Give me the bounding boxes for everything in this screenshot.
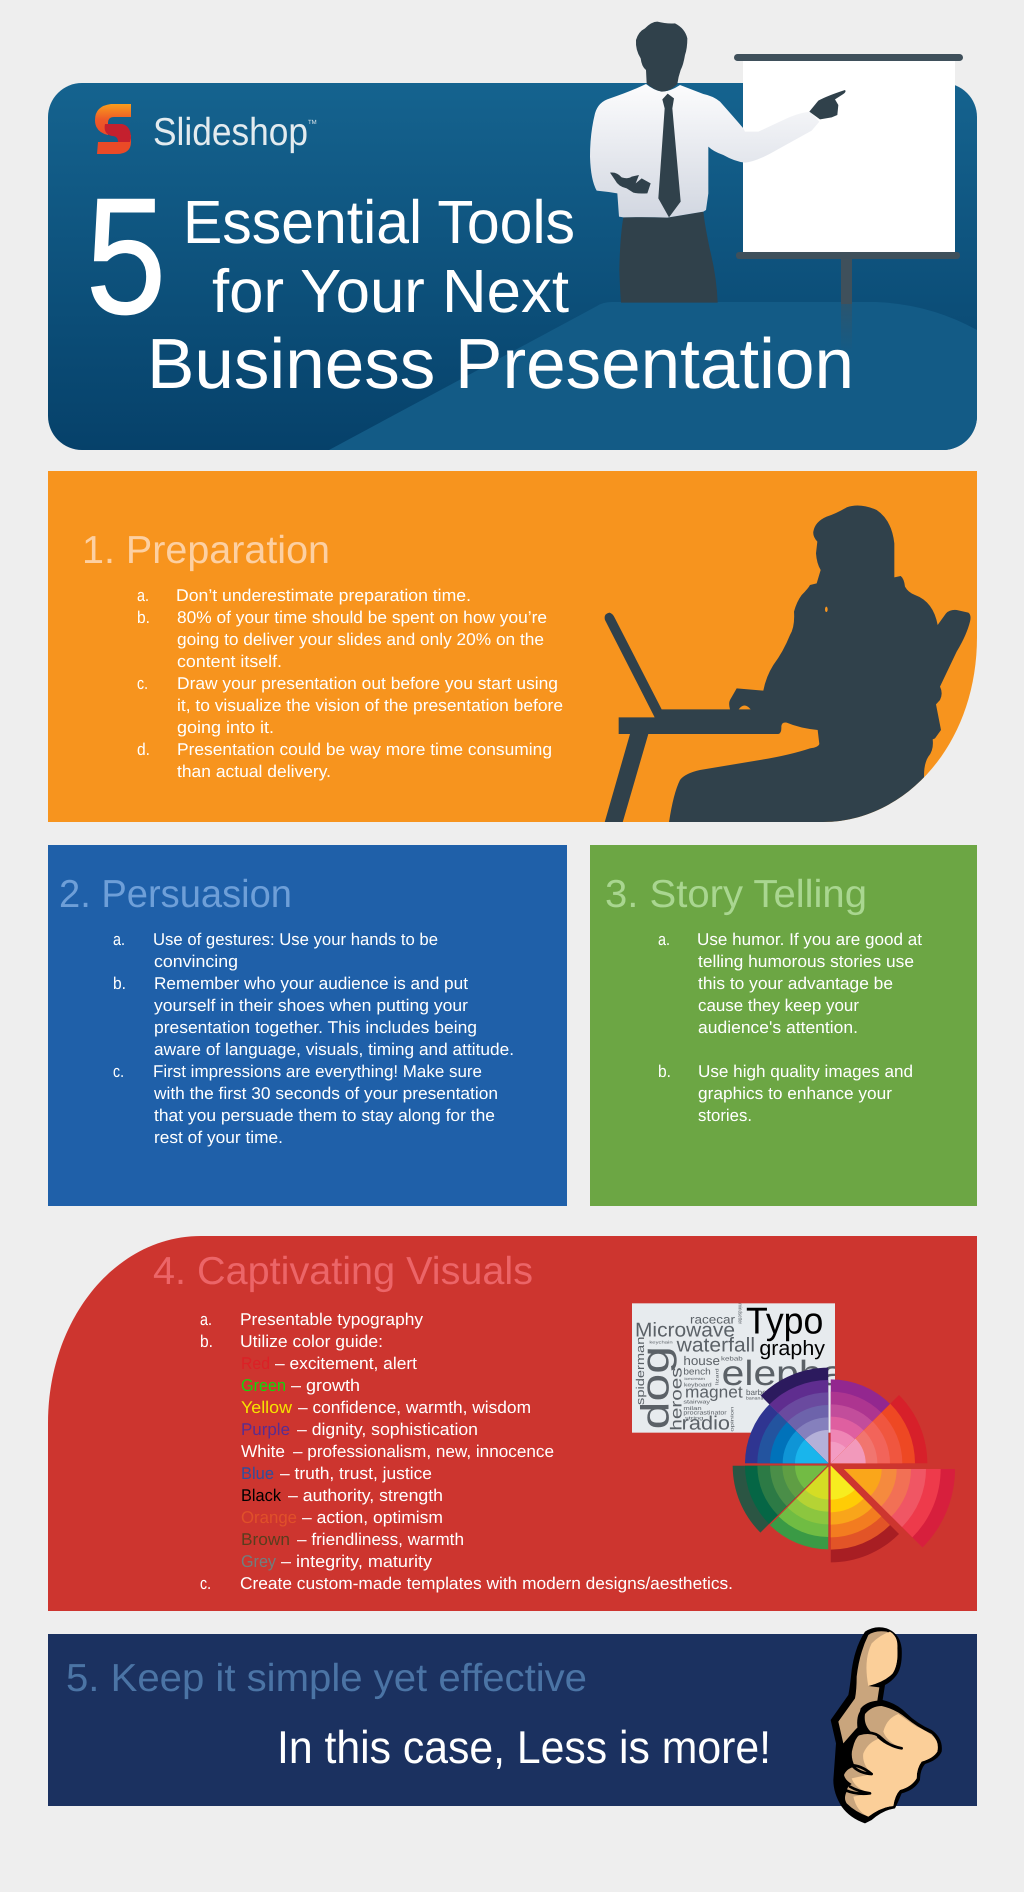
panel background	[48, 471, 977, 822]
list: Green	[241, 1376, 286, 1395]
list: b.	[200, 1332, 213, 1351]
typography word cloud: Typo	[746, 1300, 823, 1341]
panel: 4. Captivating Visuals	[48, 1236, 977, 1611]
list: d.	[137, 740, 150, 759]
list: it, to visualize the vision of the presentation before	[177, 696, 563, 715]
heading: 1. Preparation	[82, 529, 330, 572]
heading: 3. Story Telling	[605, 873, 867, 916]
typography word cloud: Microwave	[635, 1319, 735, 1341]
list: – dignity, sophistication	[297, 1420, 478, 1439]
typography word cloud	[632, 1303, 835, 1433]
list: this to your advantage be	[698, 974, 893, 993]
list: stories.	[698, 1106, 752, 1125]
list: Grey	[241, 1552, 276, 1571]
callout text: In this case, Less is more!	[277, 1721, 771, 1773]
list: Purple	[241, 1420, 290, 1439]
typography word cloud: lizard	[714, 1368, 719, 1385]
list: b.	[113, 974, 126, 993]
list: rest of your time.	[154, 1128, 283, 1147]
list: Orange	[241, 1508, 297, 1527]
list: – confidence, warmth, wisdom	[298, 1398, 531, 1417]
list: content itself.	[177, 652, 282, 671]
typography word cloud: radio	[682, 1412, 730, 1434]
list: a.	[658, 930, 670, 949]
list: – growth	[291, 1376, 360, 1395]
typography word cloud: spiderman	[634, 1337, 647, 1405]
icon: S mark	[95, 104, 131, 154]
panel: 1. Preparation	[48, 471, 977, 823]
heading: 2. Persuasion	[59, 873, 292, 916]
panel background	[590, 845, 977, 1206]
list: – professionalism, new, innocence	[293, 1442, 554, 1461]
list: Yellow	[241, 1398, 293, 1417]
list: audience's attention.	[698, 1018, 858, 1037]
list: Remember who your audience is and put	[154, 974, 468, 993]
list: 80% of your time should be spent on how you’re	[177, 608, 547, 627]
typography word cloud: heroes	[668, 1367, 685, 1431]
panel background	[48, 845, 567, 1206]
typography word cloud: dog	[633, 1346, 677, 1429]
list: b.	[137, 608, 150, 627]
heading: 4. Captivating Visuals	[153, 1250, 533, 1293]
typography word cloud: opinion	[729, 1407, 734, 1432]
list	[137, 586, 563, 781]
title: Business Presentation	[147, 325, 854, 404]
typography word cloud: elephant	[722, 1354, 878, 1393]
list: Use high quality images and	[698, 1062, 913, 1081]
title: for Your Next	[212, 257, 569, 325]
list: Create custom-made templates with modern designs/aesthetics.	[240, 1574, 733, 1593]
list: that you persuade them to stay along for the	[154, 1106, 495, 1125]
typography word cloud: icecream	[684, 1376, 705, 1381]
list: c.	[200, 1574, 211, 1593]
typography word cloud: string	[685, 1415, 703, 1420]
illustration: presenter and screen	[329, 22, 977, 450]
color wheel	[732, 1368, 955, 1562]
list: Black	[241, 1486, 281, 1505]
list: graphics to enhance your	[698, 1084, 892, 1103]
list: Don’t underestimate preparation time.	[176, 586, 471, 605]
illustration: woman at laptop silhouette	[605, 506, 971, 823]
list: a.	[113, 930, 125, 949]
panel background	[48, 1236, 977, 1611]
list: Use of gestures: Use your hands to be	[153, 930, 438, 949]
list: than actual delivery.	[177, 762, 331, 781]
list: – action, optimism	[302, 1508, 443, 1527]
list: – truth, trust, justice	[280, 1464, 432, 1483]
typography word cloud: racecar	[690, 1312, 735, 1326]
list: Presentation could be way more time consuming	[177, 740, 552, 759]
list: presentation together. This includes being	[154, 1018, 477, 1037]
list: c.	[137, 674, 148, 693]
list	[658, 930, 922, 1125]
list: Brown	[241, 1530, 290, 1549]
typography word cloud: keyboard	[684, 1382, 712, 1388]
typography word cloud: magnet	[685, 1382, 743, 1401]
presenter silhouette	[590, 22, 846, 303]
list: Utilize color guide:	[240, 1332, 383, 1351]
typography word cloud: bench	[683, 1366, 711, 1376]
typography word cloud: kebab	[721, 1355, 743, 1362]
list: with the first 30 seconds of your presentation	[153, 1084, 498, 1103]
list: Draw your presentation out before you start using	[177, 674, 558, 693]
list: Use humor. If you are good at	[697, 930, 922, 949]
list: telling humorous stories use	[698, 952, 914, 971]
panel: header	[48, 22, 977, 450]
typography word cloud: graphy	[759, 1337, 825, 1360]
heading: 5. Keep it simple yet effective	[66, 1657, 587, 1700]
list: cause they keep your	[698, 996, 859, 1015]
panel: 5. Keep it simple	[48, 1627, 977, 1823]
list	[200, 1310, 733, 1593]
title: Essential Tools	[183, 188, 575, 256]
list: going into it.	[177, 718, 274, 737]
list: yourself in their shoes when putting your	[154, 996, 468, 1015]
list: going to deliver your slides and only 20% on the	[177, 630, 544, 649]
list: – integrity, maturity	[281, 1552, 433, 1571]
list: First impressions are everything! Make sure	[153, 1062, 482, 1081]
list: a.	[200, 1310, 212, 1329]
list: Red	[241, 1354, 270, 1373]
list: Presentable typography	[240, 1310, 424, 1329]
list: – excitement, alert	[275, 1354, 417, 1373]
list: convincing	[154, 952, 238, 971]
title: 5	[86, 164, 166, 348]
icon: thumbs up	[831, 1627, 942, 1823]
list: – friendliness, warmth	[297, 1530, 464, 1549]
list: c.	[113, 1062, 124, 1081]
typography word cloud: house	[683, 1354, 720, 1368]
list: b.	[658, 1062, 671, 1081]
panel background	[48, 1634, 977, 1806]
panel: 3. Story Telling	[590, 845, 977, 1206]
projection screen	[734, 54, 963, 352]
typography word cloud: barber	[746, 1388, 769, 1397]
logo: Slideshop	[95, 104, 317, 154]
list	[113, 930, 514, 1147]
typography word cloud: waterfall	[676, 1334, 755, 1356]
list: Blue	[241, 1464, 274, 1483]
header background	[48, 83, 977, 450]
typography word cloud: keychain	[649, 1340, 673, 1344]
wordmark: Slideshop	[153, 111, 308, 154]
typography word cloud: banana	[746, 1395, 764, 1400]
typography word cloud: procrastinator	[683, 1409, 727, 1416]
list: aware of language, visuals, timing and attitude.	[154, 1040, 514, 1059]
list: a.	[137, 586, 149, 605]
list: White	[241, 1442, 285, 1461]
typography word cloud: milan	[683, 1406, 702, 1411]
list: – authority, strength	[288, 1486, 443, 1505]
title	[86, 164, 854, 404]
logo: Slideshop: TM	[308, 119, 317, 126]
typography word cloud: stairway	[683, 1399, 710, 1405]
typography word cloud: mindsetter	[737, 1303, 743, 1324]
panel: 2. Persuasion	[48, 845, 567, 1206]
